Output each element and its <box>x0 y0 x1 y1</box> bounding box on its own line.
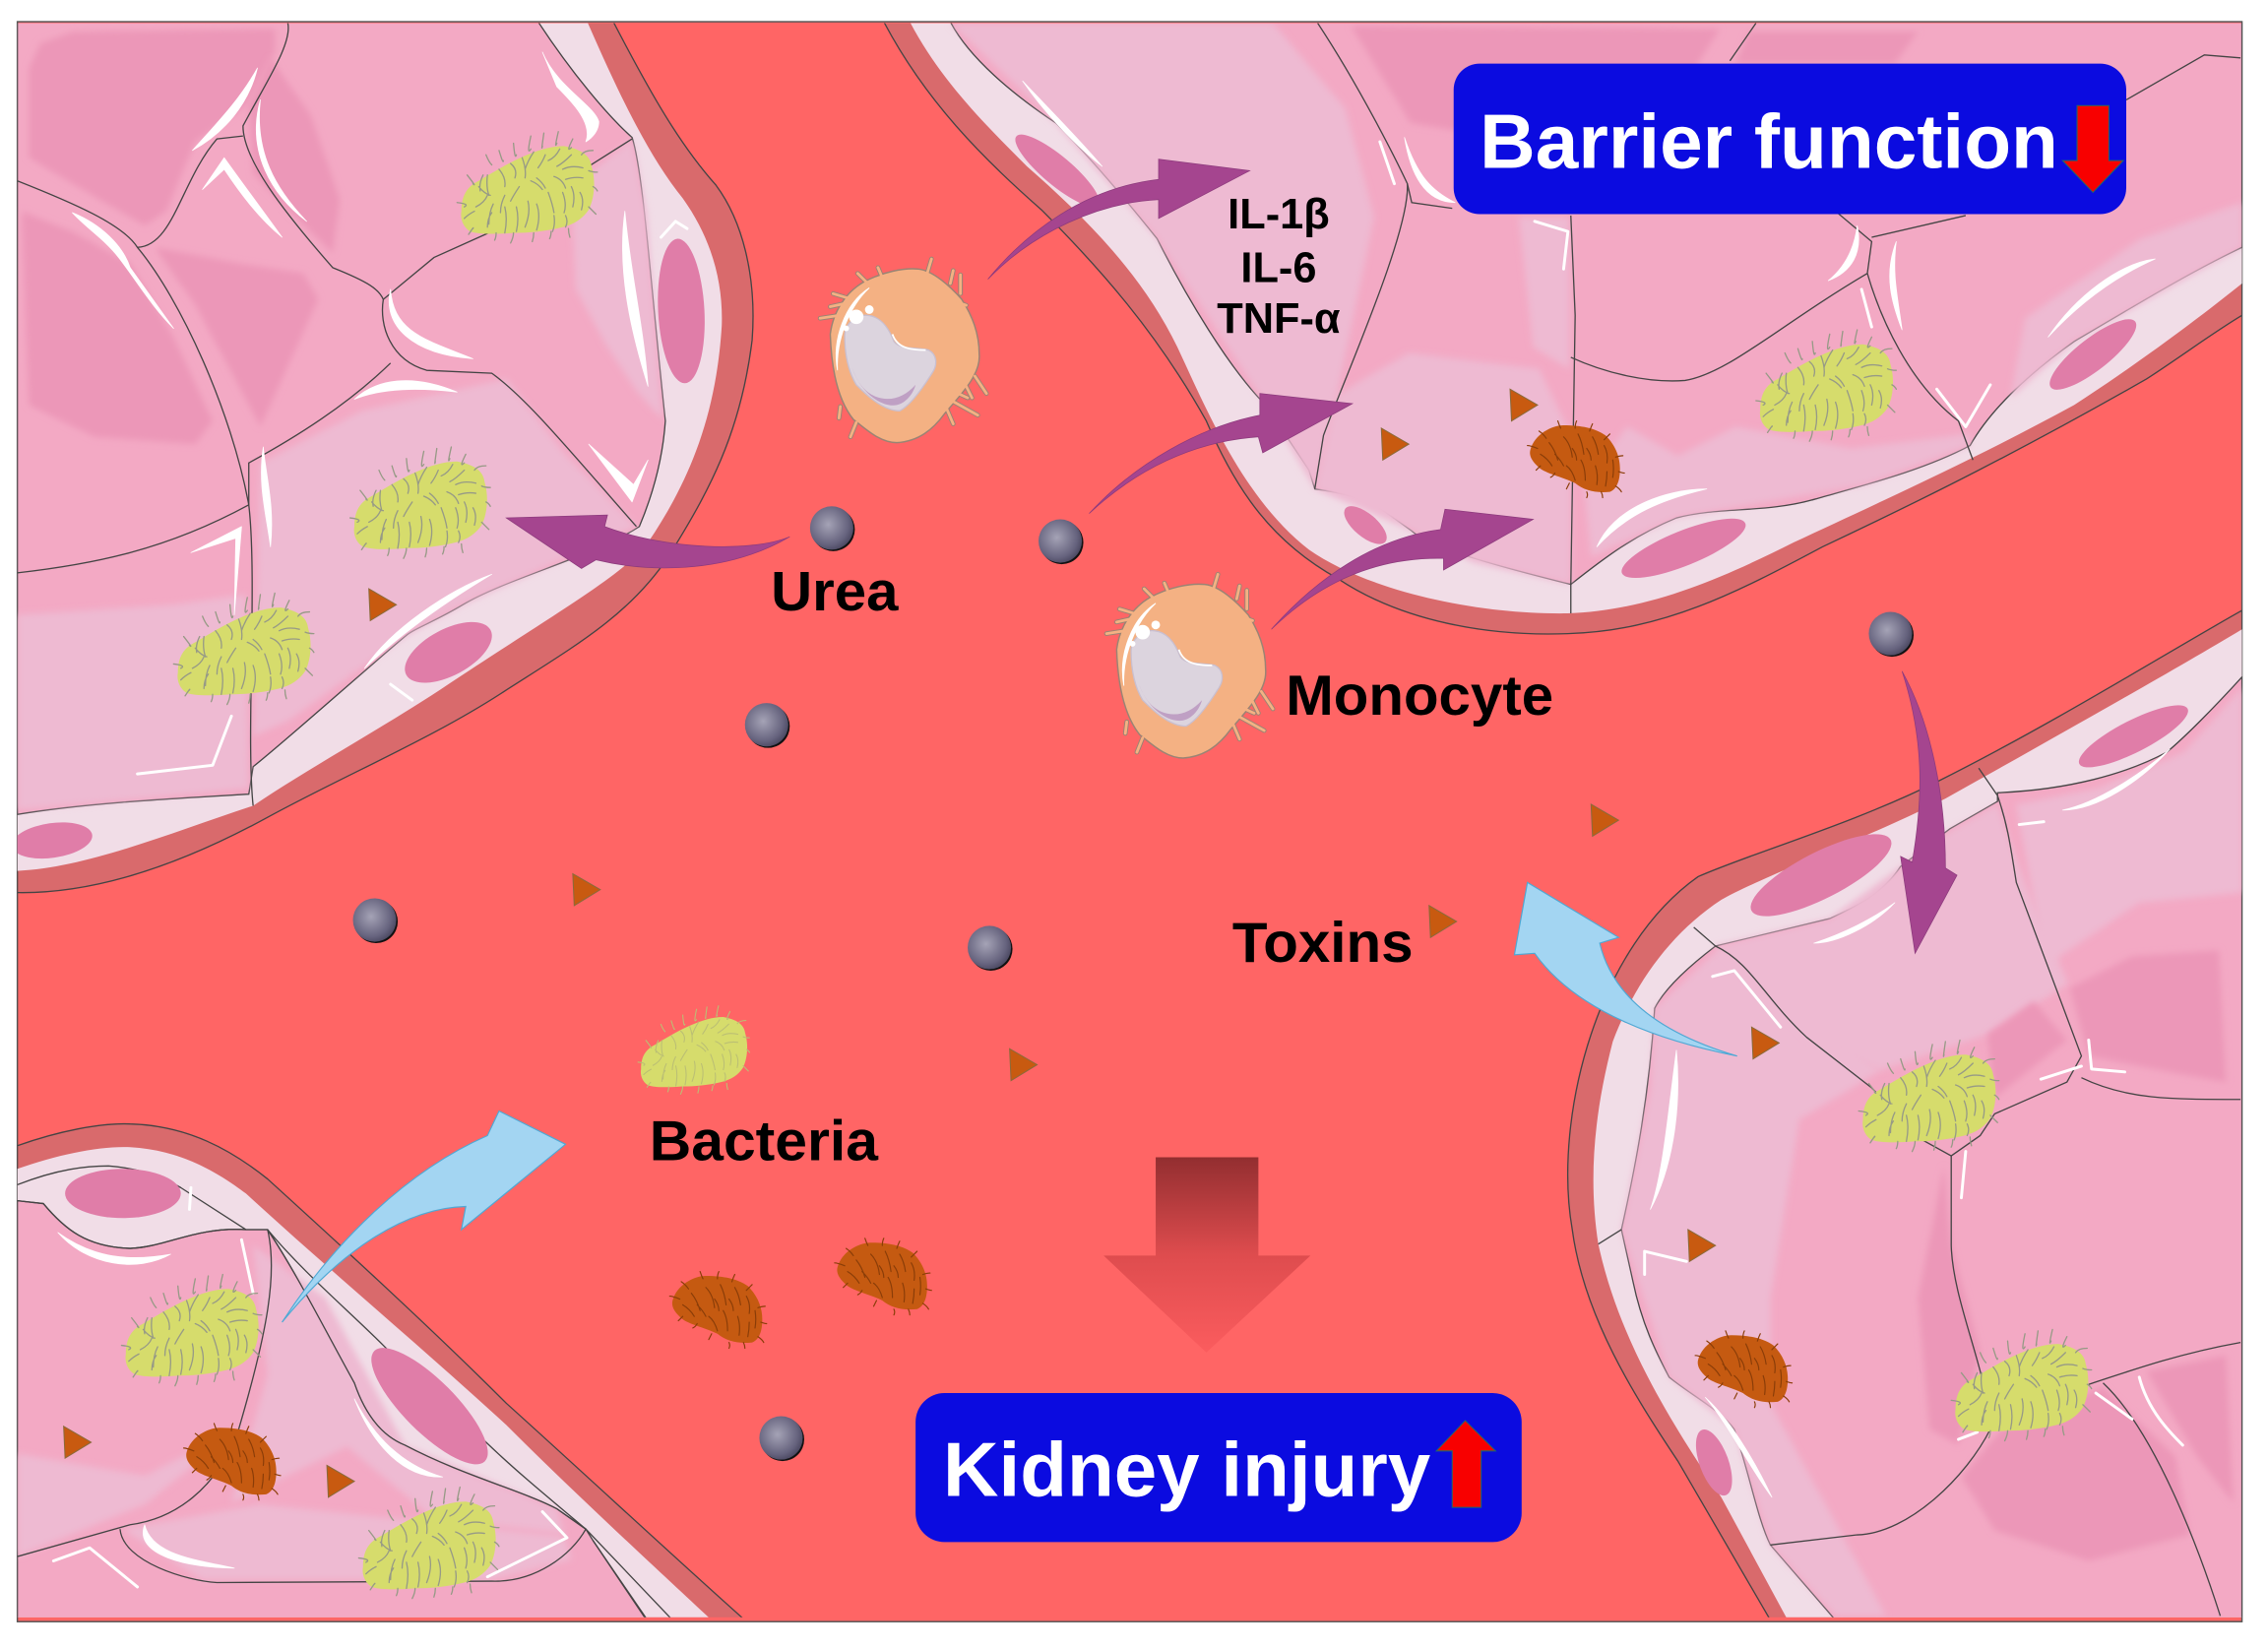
arrow: bacteria leaving bottom-left tissue <box>283 1111 566 1322</box>
toxins: orange triangles <box>64 389 1779 1497</box>
monocyte: lower <box>1106 574 1273 758</box>
bacterium: right yellow 2 <box>1951 1329 2092 1441</box>
bacterium: bottom-left yellow 2 <box>358 1488 499 1599</box>
arrow: urea particle into tissue <box>1089 394 1353 514</box>
panel: bottom-right tissue <box>1568 610 2242 1620</box>
label: cytokines <box>1217 191 1341 343</box>
bacterium: right brown <box>1695 1331 1793 1408</box>
label: Bacteria: Bacteria <box>650 1110 879 1173</box>
nucleus: band right <box>2049 319 2136 390</box>
bacterium: bottom-left brown <box>184 1424 281 1500</box>
arrow: lower monocyte into tissue <box>1272 509 1534 629</box>
nucleus: left edge <box>18 822 93 858</box>
bacterium: top-left 1 <box>457 132 598 243</box>
callout: Kidney injury: Kidney injury <box>943 1427 1430 1512</box>
arrow: monocyte to cytokines <box>988 159 1250 280</box>
arrow: large gradient down <box>1103 1158 1310 1353</box>
panel: bottom-left tissue <box>18 1124 745 1620</box>
arrow: urea to left tissue <box>506 515 789 568</box>
nucleus: lower band <box>405 622 492 683</box>
label: Toxins: Toxins <box>1232 912 1414 975</box>
label: cytokines: IL-6 <box>1240 245 1316 292</box>
bacterium: top-left 2 <box>350 447 490 558</box>
bacterium: top-right yellow <box>1756 330 1896 441</box>
icon: red down arrow <box>2062 105 2123 192</box>
label: Monocyte: Monocyte <box>1286 665 1553 728</box>
callout: Barrier function <box>1454 64 2126 214</box>
bacterium: top-right brown <box>1528 421 1624 497</box>
callout: Kidney injury <box>915 1393 1522 1542</box>
callout: Barrier function: Barrier function <box>1480 98 2058 184</box>
arrow: toxins leaving right tissue <box>1514 882 1737 1056</box>
panel: top-left tissue <box>10 22 753 893</box>
nucleus: lower band <box>1695 1429 1732 1496</box>
bacterium: top-left 3 <box>173 593 314 705</box>
bacterium: right yellow 1 <box>1858 1040 1999 1152</box>
nucleus: band upper <box>1015 134 1098 203</box>
label: cytokines: IL-1β <box>1228 191 1330 238</box>
label: cytokines: TNF-α <box>1217 295 1341 343</box>
nucleus: upper band <box>2079 705 2188 768</box>
nucleus: top-left tissue <box>658 238 705 384</box>
nucleus: band centre <box>1621 518 1746 578</box>
icon: red up arrow <box>1436 1421 1495 1507</box>
nucleus: upper band <box>65 1169 181 1218</box>
bacterium: bottom-left yellow 1 <box>121 1275 262 1386</box>
nucleus: large band <box>1750 834 1892 917</box>
arrow: urea to right tissue <box>1901 671 1957 953</box>
monocyte: upper <box>820 259 986 443</box>
bacterium: lumen brown 2 <box>835 1238 931 1315</box>
bacterium: lumen yellow <box>638 1005 750 1095</box>
label: Urea: Urea <box>771 560 899 622</box>
panel: top-right tissue <box>884 22 2242 634</box>
nucleus: large diagonal <box>371 1348 488 1465</box>
urea: grey particles <box>353 506 1914 1461</box>
nucleus: band small <box>1345 506 1387 544</box>
bacterium: lumen brown 1 <box>669 1272 767 1348</box>
